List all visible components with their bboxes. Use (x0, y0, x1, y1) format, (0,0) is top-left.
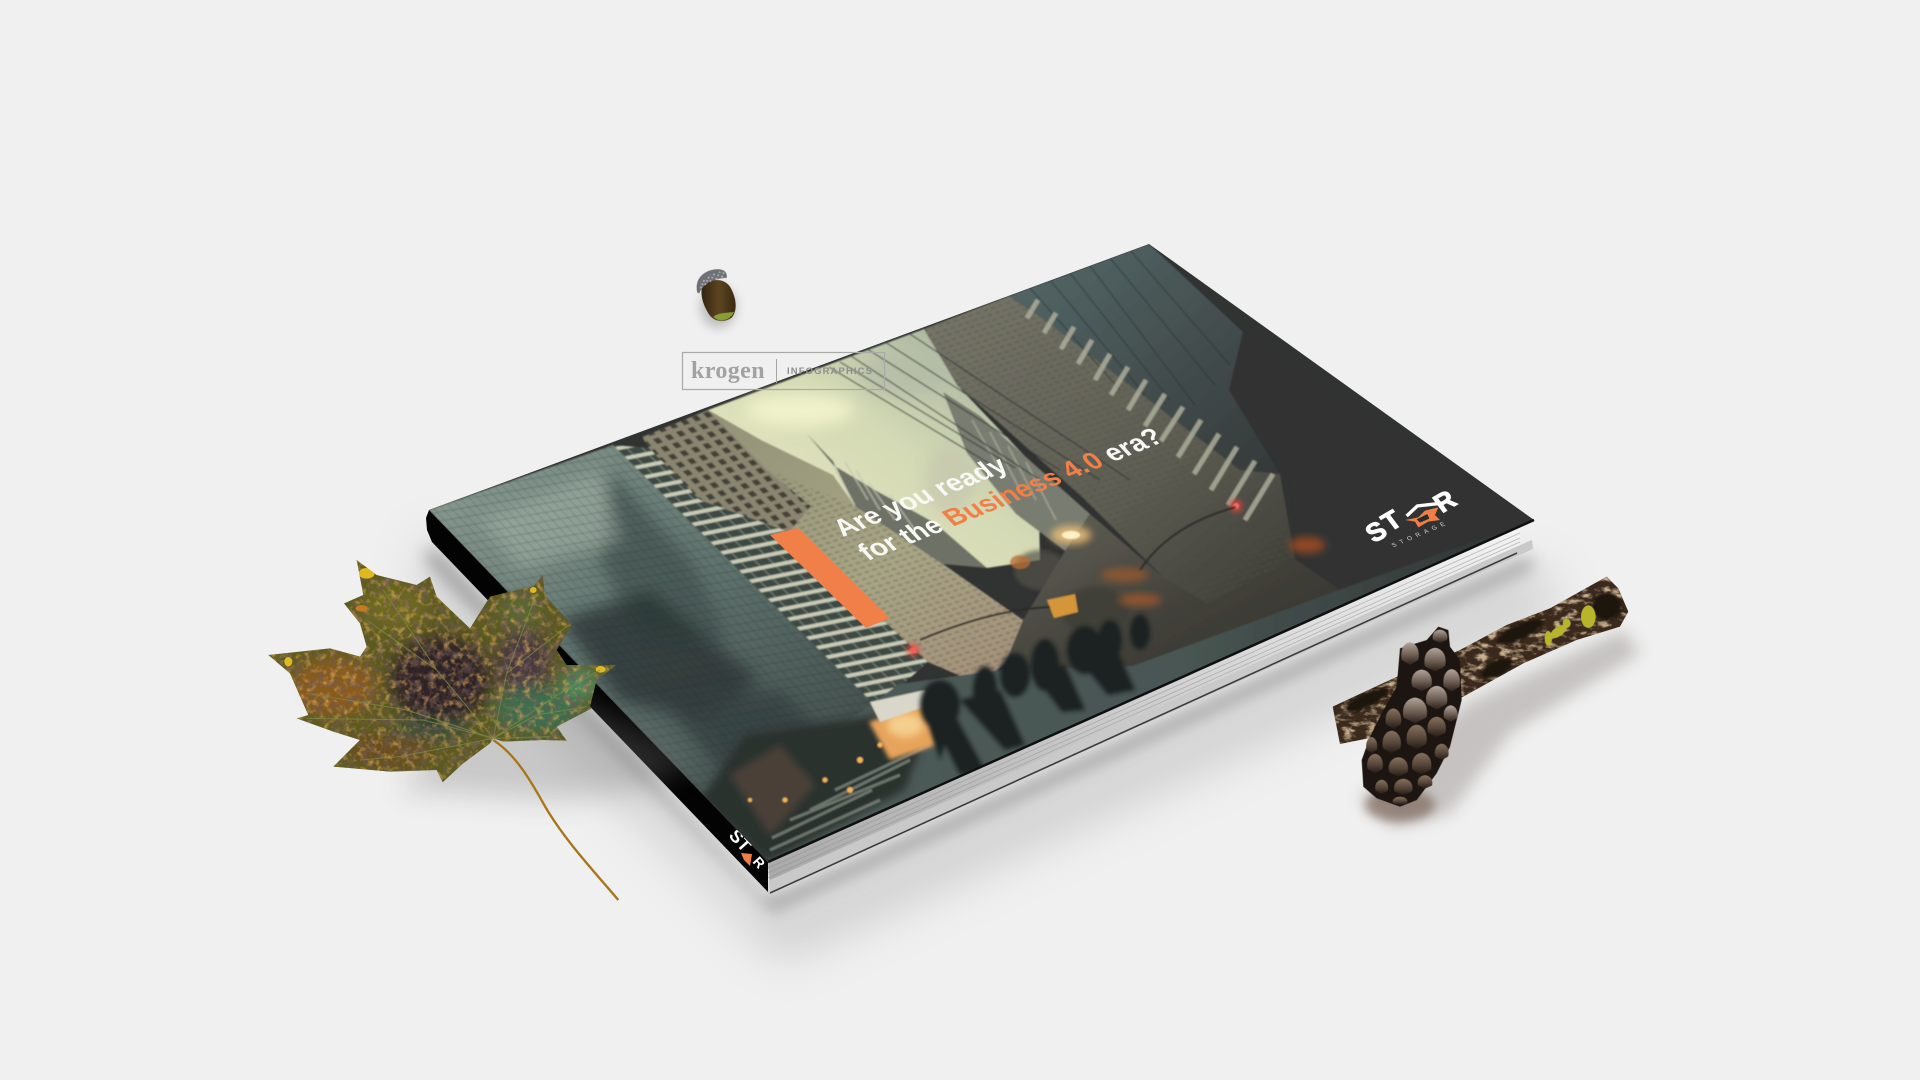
sky (708, 329, 1040, 568)
cover logo (1359, 484, 1462, 549)
back cover dark line (770, 553, 1517, 893)
tan upper building (642, 410, 811, 532)
logo wordmark: krogen (691, 358, 765, 384)
lower left dark block (700, 715, 920, 862)
spine (426, 510, 768, 892)
cone upper scales (1401, 629, 1460, 723)
maple leaf (263, 557, 700, 900)
headline: for the Business 4.0 era? (851, 422, 1170, 565)
headline: Are you ready (826, 451, 1015, 541)
logo sub text: STORAGE (1390, 519, 1451, 549)
photo (429, 244, 1534, 862)
lower left lights (748, 742, 882, 802)
right grey building (924, 296, 1295, 604)
leaf stem (493, 740, 618, 900)
second tower (943, 392, 1090, 551)
beige facade (708, 410, 1024, 676)
twig bark texture (1330, 573, 1630, 747)
twig shadow (1360, 630, 1640, 827)
left glass building (429, 445, 900, 862)
logo divider (776, 359, 778, 383)
acorn shadow (700, 285, 737, 328)
striped building (635, 448, 923, 683)
lower left storefront (730, 745, 815, 835)
acorn cap texture (701, 272, 724, 288)
leaf veins (307, 590, 600, 760)
acorn (697, 269, 737, 328)
dark silhouette (1523, 512, 1532, 519)
spine logo: ST (725, 825, 755, 856)
spine logo (725, 825, 768, 872)
logo star (1405, 507, 1440, 527)
logo letters (1359, 484, 1462, 548)
acorn nut (701, 280, 736, 321)
logo tagline: INFOGRAPHICS (787, 366, 873, 377)
leaf shadow (300, 680, 700, 800)
spine logo: R (750, 853, 768, 872)
cone lower scales (1366, 708, 1449, 805)
orange bar (770, 528, 890, 628)
pine twig and cone (1330, 573, 1640, 827)
twig dark patches (1343, 593, 1622, 716)
page block (768, 528, 1520, 880)
twig lichen (1545, 605, 1596, 646)
shop glow (869, 690, 936, 760)
acorn tip (713, 312, 734, 320)
book shadow (420, 530, 1560, 960)
cover (420, 240, 1540, 870)
logo letters: R (1427, 484, 1462, 518)
logo letters: S (1359, 515, 1393, 548)
street corridor (1007, 514, 1338, 668)
Chrysler tower (807, 434, 987, 568)
street trees (1014, 550, 1129, 634)
road (768, 537, 1490, 860)
building white columns (1027, 300, 1273, 520)
leaf mottling (263, 557, 623, 787)
cone shadow (1365, 788, 1435, 822)
glass tower lines (1030, 250, 1230, 405)
cover edge dark (768, 520, 1534, 862)
street lights (1010, 526, 1325, 618)
back cover edge (768, 540, 1533, 893)
crosswalk (770, 745, 930, 850)
logo roof (1407, 503, 1444, 516)
cover base (420, 240, 1540, 870)
page edge lines (768, 533, 1520, 878)
glass grid (432, 446, 858, 785)
logo letters: T (1375, 505, 1407, 537)
leaf colour patches (290, 583, 600, 767)
acorn cap (697, 269, 727, 293)
glass reflection (484, 472, 811, 768)
logo star centre (1417, 514, 1429, 523)
book (420, 240, 1540, 893)
cloud highlights (745, 353, 976, 515)
pine cone (1362, 627, 1462, 807)
wires (829, 334, 1130, 480)
cone base (1362, 627, 1462, 807)
upper right glass tower (1009, 244, 1280, 474)
leaf body (263, 557, 623, 787)
leaf yellow tips (284, 568, 606, 673)
pedestrians (920, 614, 1150, 775)
logo box: krogen infographics (682, 352, 884, 390)
traffic lights (906, 499, 1243, 657)
scene: book mockup with natural objects (268, 244, 1642, 966)
twig (1330, 573, 1630, 747)
